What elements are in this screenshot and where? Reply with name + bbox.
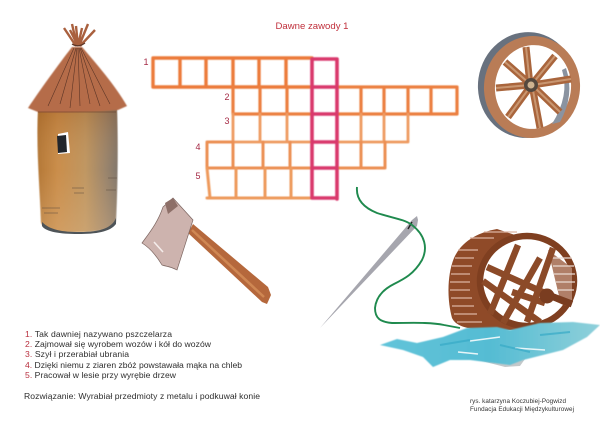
paddle drum [448, 229, 530, 330]
credits: rys. katarzyna Koczubiej-Pogwizd [470, 398, 566, 405]
solution hint: Rozwiązanie: Wyrabiał przedmioty z metalu i podkuwał konie [24, 391, 260, 401]
crossword row numbers: 1 [143, 57, 149, 67]
grey shadow [470, 352, 530, 367]
wheel hub [524, 78, 538, 92]
wheel struts [483, 245, 567, 323]
credits: Fundacja Edukacji Międzykulturowej [470, 406, 574, 413]
wheel rim [477, 30, 587, 144]
water waves [380, 322, 600, 367]
water body [380, 322, 600, 367]
icon: cart wheel [471, 26, 587, 144]
icon: beehive [28, 24, 127, 234]
clue 1: 1. Tak dawniej nazywano pszczelarza [25, 329, 172, 339]
crossword row 1 [153, 58, 312, 87]
wheel axle [540, 288, 554, 304]
crossword row numbers [143, 57, 230, 181]
far-side paddles [548, 250, 572, 300]
clue list [25, 329, 242, 380]
crossword row numbers: 2 [224, 92, 230, 102]
wheel spokes [496, 47, 571, 128]
crossword row numbers: 5 [195, 171, 201, 181]
hive window [58, 132, 70, 154]
clue 5: 5. Pracował w lesie przy wyrębie drzew [25, 370, 177, 380]
water highlights [458, 337, 545, 354]
crossword row numbers: 3 [224, 116, 230, 126]
hive thatch tuft [64, 24, 95, 46]
axe handle [188, 224, 271, 304]
crossword row 3 [233, 114, 408, 142]
clue 4: 4. Dzięki niemu z ziaren zbóż powstawała mąka na chleb [25, 360, 242, 370]
title: Dawne zawody 1 [276, 21, 348, 32]
wheel tyre [471, 26, 583, 144]
crossword grid [153, 58, 457, 199]
clue 2: 2. Zajmował się wyrobem wozów i kół do wozów [25, 339, 212, 349]
wheel front ring [480, 236, 574, 326]
icon: needle and thread [320, 187, 460, 328]
icon: water wheel [448, 229, 575, 330]
crossword row 2 [233, 87, 457, 114]
credits [470, 398, 574, 413]
hive roof [28, 47, 127, 112]
crossword row numbers: 4 [195, 142, 201, 152]
crossword row 4 [207, 142, 385, 168]
crossword row 5 [207, 168, 312, 198]
icon: axe [142, 198, 271, 304]
axe head [142, 198, 193, 270]
green thread [357, 187, 460, 328]
needle [320, 216, 418, 328]
hive body [37, 108, 118, 232]
solution column [312, 59, 337, 199]
clue 3: 3. Szył i przerabiał ubrania [25, 349, 129, 359]
